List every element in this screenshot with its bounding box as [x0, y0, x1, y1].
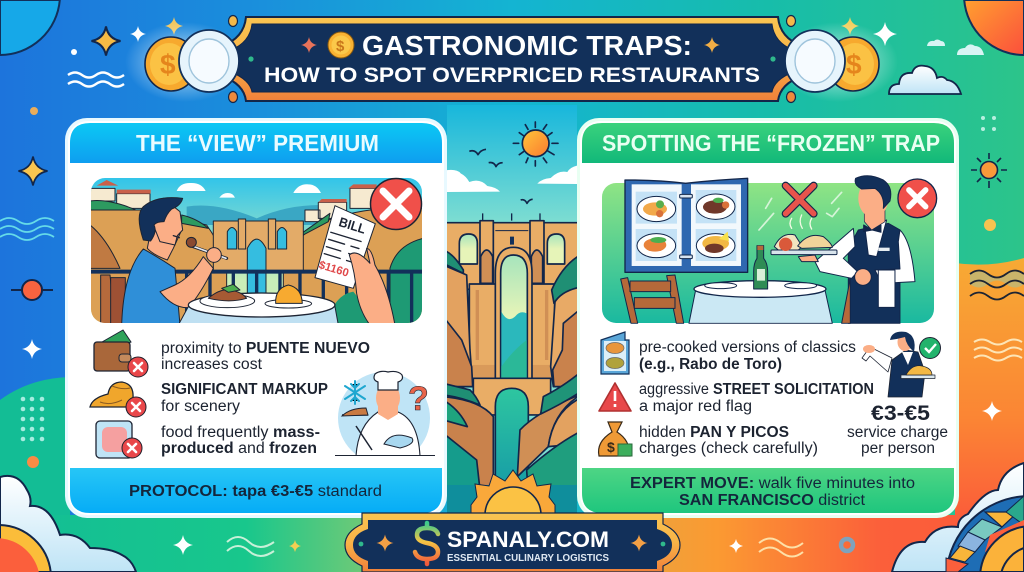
icon: wallet [94, 330, 148, 377]
illustration: chef with frozen dish [335, 371, 435, 464]
central illustration: Puente Nuevo bridge [443, 103, 583, 522]
icon: wine bottle [754, 246, 768, 289]
person [122, 198, 227, 325]
icon: pastry [90, 382, 146, 417]
icon: sun above bridge [513, 122, 558, 166]
icon: left coin: $ [160, 49, 176, 80]
text: for scenery: for scenery [161, 398, 240, 415]
icon: money bag [599, 422, 632, 456]
logo: dollar S [415, 523, 438, 564]
corner: top right circle [964, 0, 1024, 55]
banner frame [222, 16, 802, 102]
icon: large red cross [786, 186, 814, 214]
icon: title coin [328, 32, 354, 58]
tray [771, 250, 837, 255]
illustration: diner with bill overlooking bridge [90, 177, 423, 325]
panel header: green [582, 123, 954, 163]
illustration: waitress [862, 332, 935, 397]
decorations: left side [0, 17, 183, 468]
icon: question mark: ? [408, 380, 429, 418]
hand [349, 248, 395, 325]
tagline: ESSENTIAL CULINARY LOGISTICS [447, 552, 609, 564]
decorations: right side [841, 17, 1024, 421]
icon: right plate [785, 30, 845, 92]
sun behind footer badge [471, 470, 555, 515]
text: produced and frozen: produced and frozen [161, 440, 317, 457]
icon: red cross on bill [370, 178, 422, 230]
panel: the view premium [65, 118, 447, 518]
text: pan y picos: hidden PAN Y PICOS [639, 424, 789, 441]
footer badge [345, 513, 680, 572]
icon: chair [621, 275, 684, 323]
bridge [213, 221, 303, 271]
foliage [447, 250, 464, 274]
illustration: diner with bill overlooking bridge: $1160 [317, 259, 350, 280]
text: charges: charges (check carefully) [639, 440, 818, 457]
table [689, 290, 832, 323]
corner: bottom left cloud and sun [0, 476, 136, 572]
icon: snowflake [345, 381, 365, 404]
title banner [125, 16, 898, 102]
title text line 2: HOW TO SPOT OVERPRICED RESTAURANTS [264, 63, 760, 87]
text: rabo de toro: (e.g., Rabo de Toro) [639, 356, 782, 373]
panel header: green: SPOTTING THE “FROZEN” TRAP [602, 130, 940, 156]
icon: right coin [827, 37, 879, 91]
panel footer: protocol: PROTOCOL: tapa €3-€5 standard [129, 483, 382, 500]
illustration: diner with bill overlooking bridge: BILL [337, 214, 368, 237]
panel header: blue: THE “VIEW” PREMIUM [136, 130, 379, 156]
text: per person: per person [861, 440, 935, 457]
icon: frozen meat package [96, 421, 142, 458]
icon: money bag: $ [607, 439, 615, 455]
panel footer: expert move [582, 468, 954, 513]
text: proximity: proximity to PUENTE NUEVO [161, 340, 370, 357]
icon: picture menu [625, 178, 748, 272]
panel footer: protocol [70, 468, 442, 513]
text: food frequently: food frequently mass- [161, 424, 320, 441]
icon: red cross badge [898, 179, 937, 218]
icon: small menu [601, 332, 629, 374]
table [178, 307, 338, 325]
text: increases cost: increases cost [161, 356, 263, 373]
illustration: frozen menu and waiter [602, 176, 937, 323]
text: aggressive: aggressive STREET SOLICITATION [639, 381, 874, 398]
decorations: bottom strip [173, 535, 853, 556]
title text line 1: GASTRONOMIC TRAPS: [362, 30, 692, 61]
bill [315, 206, 375, 288]
corner: top left circle [0, 0, 60, 55]
panel: spotting the frozen trap [577, 118, 959, 518]
brand name: SPANALY.COM [447, 527, 609, 552]
text: service charge: service charge [847, 424, 948, 441]
cliffs [447, 266, 473, 376]
text: significant markup: SIGNIFICANT MARKUP [161, 381, 328, 398]
panel header: blue [70, 123, 442, 163]
corner: bottom right cloud and mosaic sun [892, 463, 1024, 572]
text: red flag: a major red flag [639, 398, 752, 415]
badge frame [345, 513, 680, 572]
icon: warning triangle [599, 383, 631, 411]
icon: title coin: $ [336, 38, 345, 55]
text: pre-cooked: pre-cooked versions of classics [639, 339, 856, 356]
panel footer: expert move: SAN FRANCISCO district [679, 492, 866, 509]
icon: left coin [145, 37, 197, 91]
icon: left plate [179, 30, 239, 92]
text: price: €3-€5 [871, 402, 930, 425]
waiter [798, 176, 915, 323]
icon: green check [920, 338, 940, 358]
panel footer: expert move: EXPERT MOVE: walk five minutes into [630, 475, 915, 492]
icon: right coin: $ [846, 49, 862, 80]
